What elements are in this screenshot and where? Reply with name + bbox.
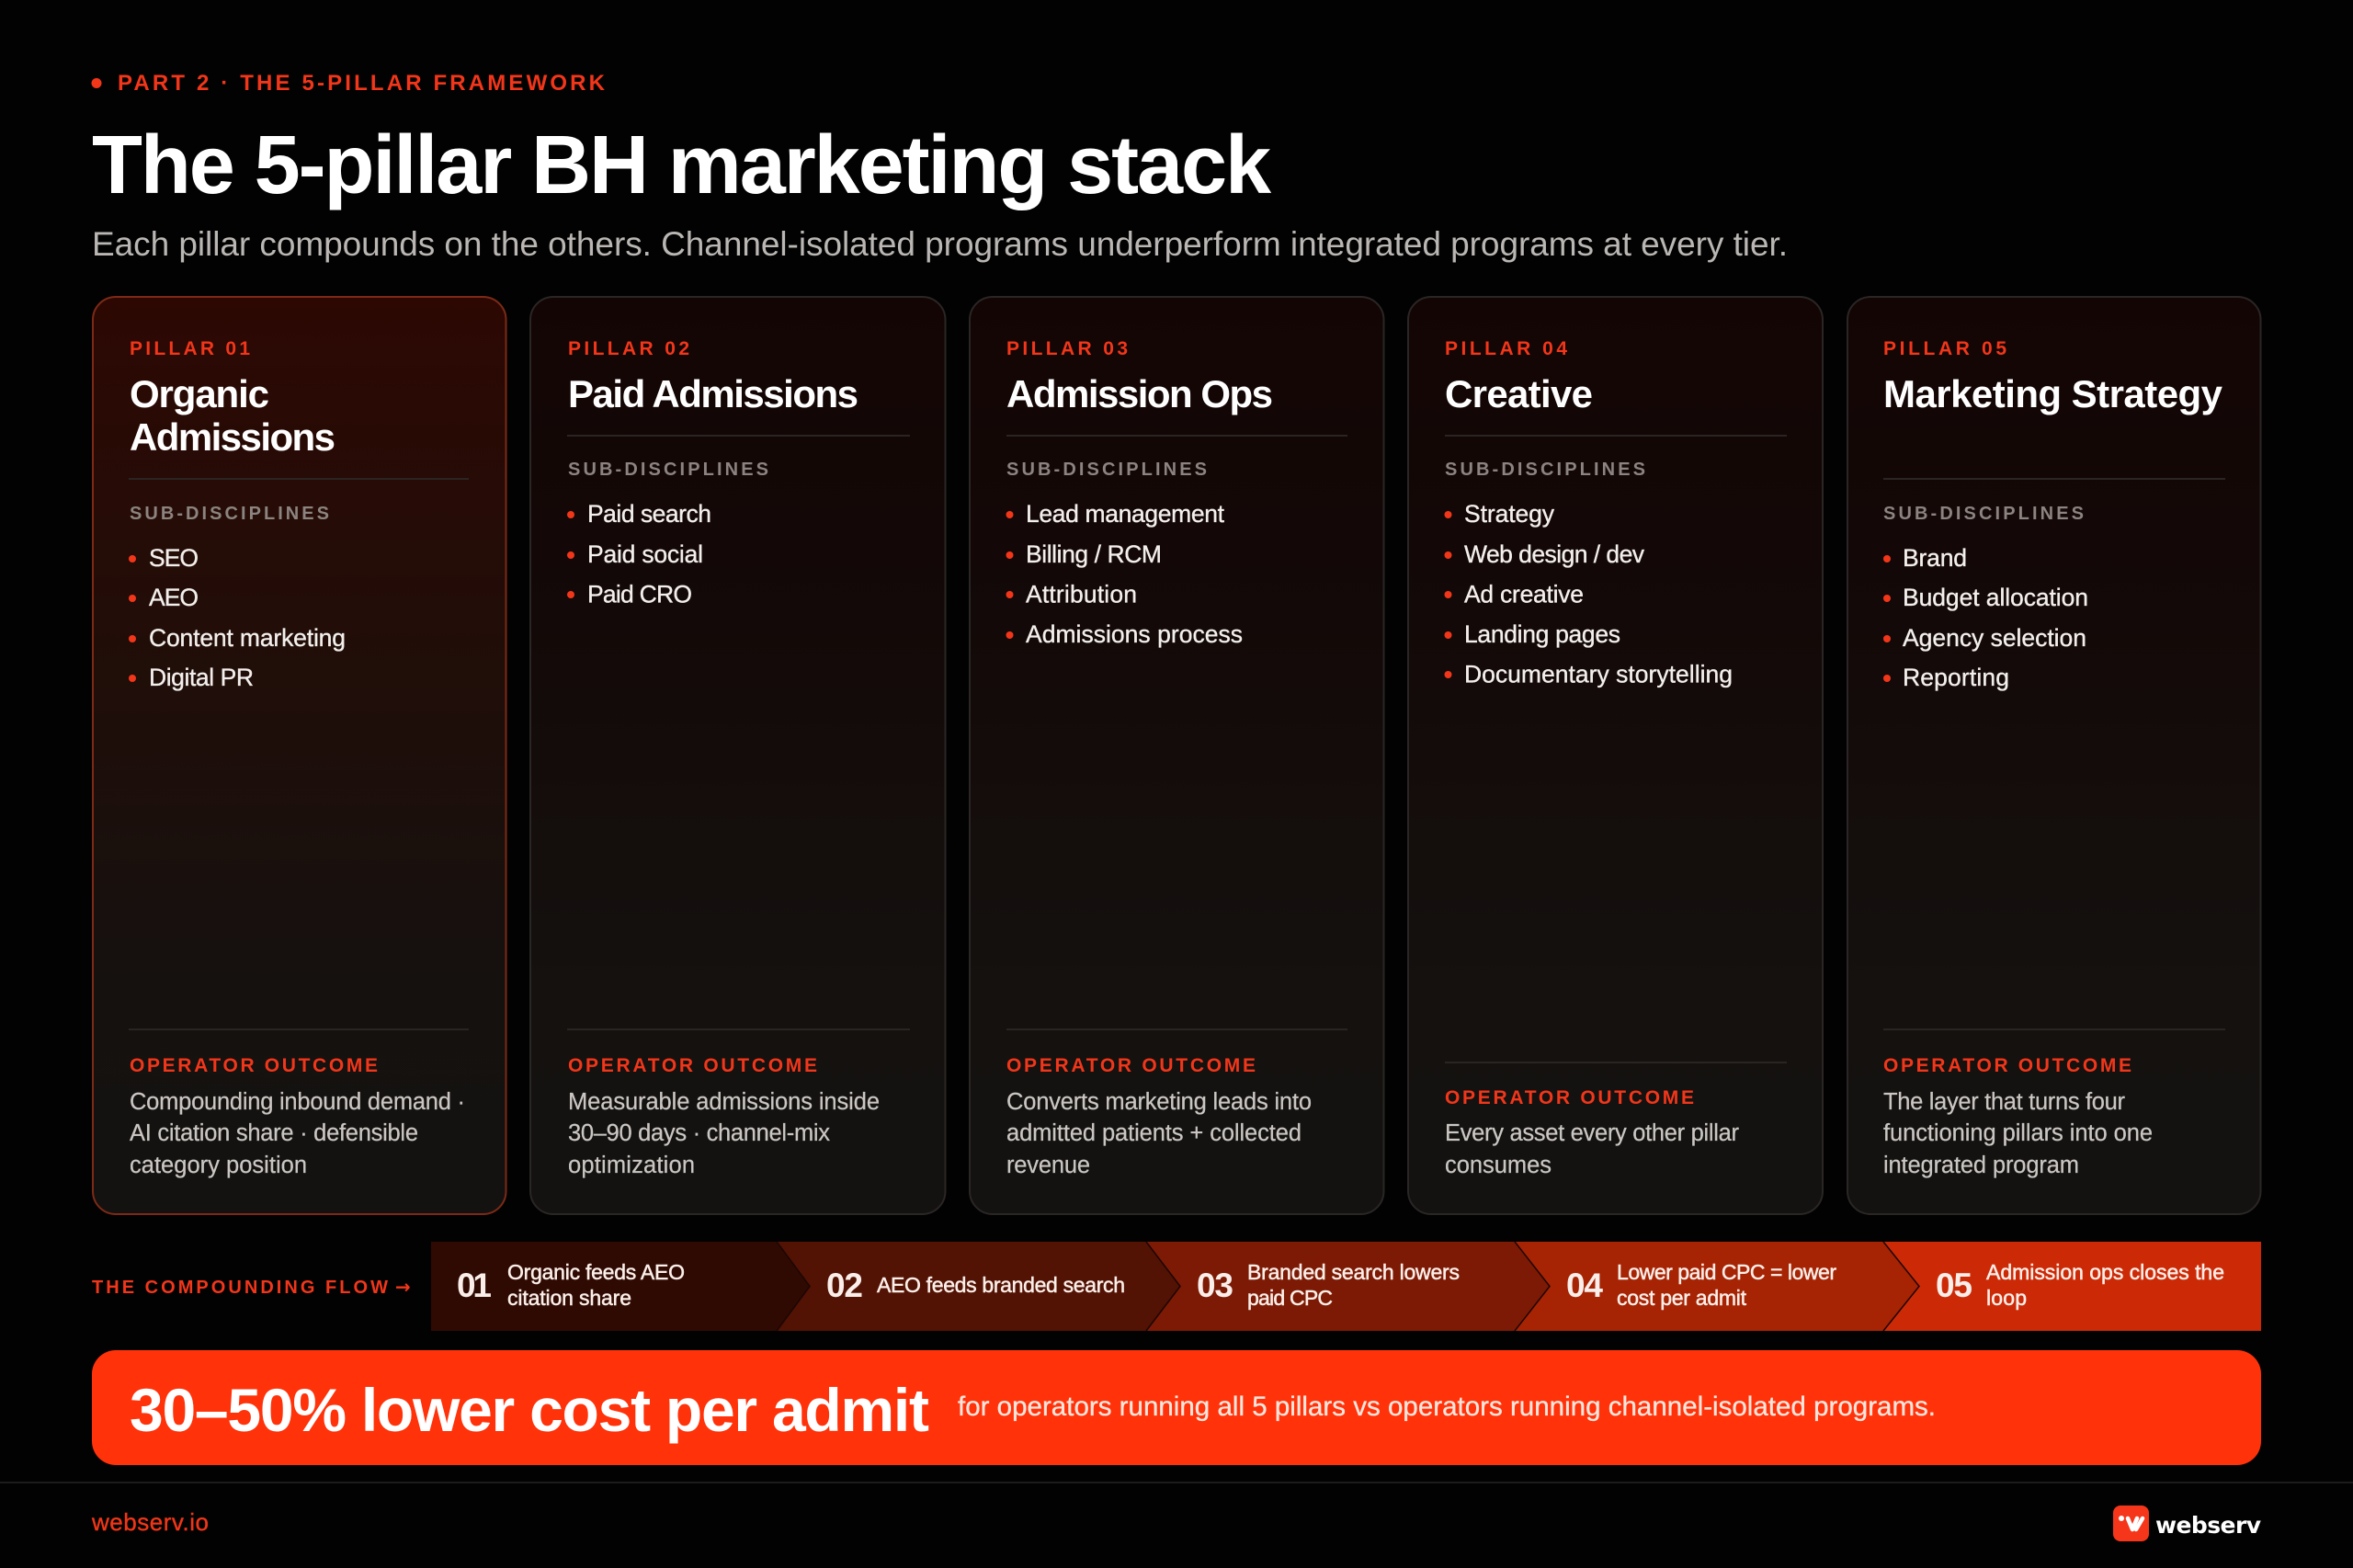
flow step 04: 04 [1566,1267,1603,1304]
panel: pillar 05 [1847,297,2261,1214]
pillar 04 heading: Creative [1445,372,1593,415]
panel: pillar 03: PILLAR 03 [1006,338,1128,359]
pillar 04 list [1445,500,1733,687]
pillar 05 list [1883,544,2088,691]
pillar 01 list: AEO [149,584,199,611]
logo: webserv [2113,1506,2261,1541]
panel: pillar 04: OPERATOR OUTCOME [1445,1087,1694,1108]
flow step 04: Lower paid CPC = lower [1617,1260,1836,1284]
panel: pillar 04: SUB-DISCIPLINES [1445,460,1645,480]
panel: pillar 05: OPERATOR OUTCOME [1883,1055,2131,1076]
pillar 02 outcome: Measurable admissions inside [568,1089,880,1115]
panel: pillar 03 [970,297,1384,1214]
pillar 01 outcome [130,1089,465,1178]
panel: pillar 03: SUB-DISCIPLINES [1006,460,1207,480]
pillar 01 outcome: category position [130,1153,307,1178]
flow step 02: 02 [826,1267,863,1304]
pillar 04 list: Web design / dev [1464,540,1645,568]
panel: pillar 05: SUB-DISCIPLINES [1883,504,2084,524]
panel: pillar 03: OPERATOR OUTCOME [1006,1055,1256,1076]
pillar 04 outcome: Every asset every other pillar [1445,1120,1739,1146]
flow step 03: paid CPC [1247,1286,1333,1310]
pillar 03 outcome [1006,1089,1312,1178]
panel: pillar 02: OPERATOR OUTCOME [568,1055,817,1076]
panel: pillar 01: SUB-DISCIPLINES [130,504,329,524]
eyebrow: PART 2 · THE 5-PILLAR FRAMEWORK [118,71,606,96]
pillar 01 list: SEO [149,544,199,572]
pillar 01 list: Digital PR [149,664,254,691]
pillar 03 list: Attribution [1026,581,1137,608]
callout banner: for operators running all 5 pillars vs operators running channel-isolated programs. [958,1392,1936,1422]
panel: pillar 01 [93,297,506,1214]
pillar 02 list: Paid CRO [587,581,692,608]
pillar 01 heading: Admissions [130,415,335,459]
footer url: webserv.io [91,1508,209,1536]
flow step 03: 03 [1197,1267,1233,1304]
pillar 03 list: Billing / RCM [1026,540,1162,568]
pillar 04 outcome: consumes [1445,1153,1552,1178]
pillar 04 outcome [1445,1120,1739,1178]
pillar 04 list: Strategy [1464,500,1555,528]
flow step 01: Organic feeds AEO [507,1260,685,1284]
pillar 04 list: Ad creative [1464,581,1584,608]
pillar 02 heading: Paid Admissions [568,372,858,415]
flow step 01: 01 [457,1267,492,1304]
panel: pillar 04: PILLAR 04 [1445,338,1567,359]
pillar 04 list: Documentary storytelling [1464,660,1733,687]
pillar 05 outcome [1883,1089,2153,1178]
pillar 01 outcome: AI citation share · defensible [130,1120,418,1146]
pillar 01 list: Content marketing [149,624,346,652]
panel: pillar 02: SUB-DISCIPLINES [568,460,768,480]
flow step 05: loop [1986,1286,2027,1310]
flow step 05 [1883,1242,2261,1331]
panel: pillar 02 [530,297,945,1214]
panel: pillar 02: PILLAR 02 [568,338,689,359]
pillar 01 heading: Organic [130,372,269,415]
panel: pillar 05: PILLAR 05 [1883,338,2006,359]
flow step 05: Admission ops closes the [1986,1260,2224,1284]
flow step 01 [431,1242,810,1331]
flow step 03 [1146,1242,1550,1331]
flow step 04: cost per admit [1617,1286,1747,1310]
pillar 01 outcome: Compounding inbound demand · [130,1089,465,1115]
logo: webserv: webserv [2155,1512,2261,1539]
pillar 05 list: Budget allocation [1903,584,2088,611]
panel: pillar 01: OPERATOR OUTCOME [130,1055,378,1076]
flow step 04 [1515,1242,1919,1331]
pillar 01 list [129,544,346,691]
pillar 03 heading: Admission Ops [1006,372,1273,415]
pillar 03 outcome: admitted patients + collected [1006,1120,1302,1146]
flow label: THE COMPOUNDING FLOW [92,1278,388,1298]
pillar 02 outcome: 30–90 days · channel-mix [568,1120,830,1146]
pillar 03 list: Admissions process [1026,620,1243,648]
flow label: → [395,1276,411,1298]
pillar 05 outcome: The layer that turns four [1883,1089,2125,1115]
pillar 05 outcome: functioning pillars into one [1883,1120,2153,1146]
pillar 05 list: Agency selection [1903,624,2086,652]
flow step 03: Branded search lowers [1247,1260,1460,1284]
pillar 03 outcome: Converts marketing leads into [1006,1089,1312,1115]
pillar 02 list [567,500,711,608]
callout banner: 30–50% lower cost per admit [130,1376,929,1444]
subtitle: Each pillar compounds on the others. Channel-isolated programs underperform integrated programs at every tier. [92,225,1788,263]
callout banner [92,1350,2261,1465]
flow step 05: 05 [1936,1267,1972,1304]
pillar 03 outcome: revenue [1006,1153,1090,1178]
panel: pillar 04 [1408,297,1823,1214]
flow step 02: AEO feeds branded search [877,1273,1125,1297]
pillar 02 outcome [568,1089,880,1178]
pillar 03 list: Lead management [1026,500,1225,528]
flow step 02 [777,1242,1180,1331]
panel: pillar 01: PILLAR 01 [130,338,250,359]
pillar 04 list: Landing pages [1464,620,1620,648]
flow step 01: citation share [507,1286,631,1310]
pillar 05 list: Brand [1903,544,1967,572]
pillar 05 heading: Marketing Strategy [1883,372,2223,415]
pillar 05 list: Reporting [1903,664,2009,691]
pillar 03 list [1006,500,1243,648]
pillar 02 list: Paid social [587,540,703,568]
title: The 5-pillar BH marketing stack [92,119,1272,211]
pillar 02 outcome: optimization [568,1153,695,1178]
pillar 01 heading [130,372,335,459]
compounding flow chevrons [431,1242,2261,1331]
pillar 02 list: Paid search [587,500,711,528]
pillar 05 outcome: integrated program [1883,1153,2079,1178]
